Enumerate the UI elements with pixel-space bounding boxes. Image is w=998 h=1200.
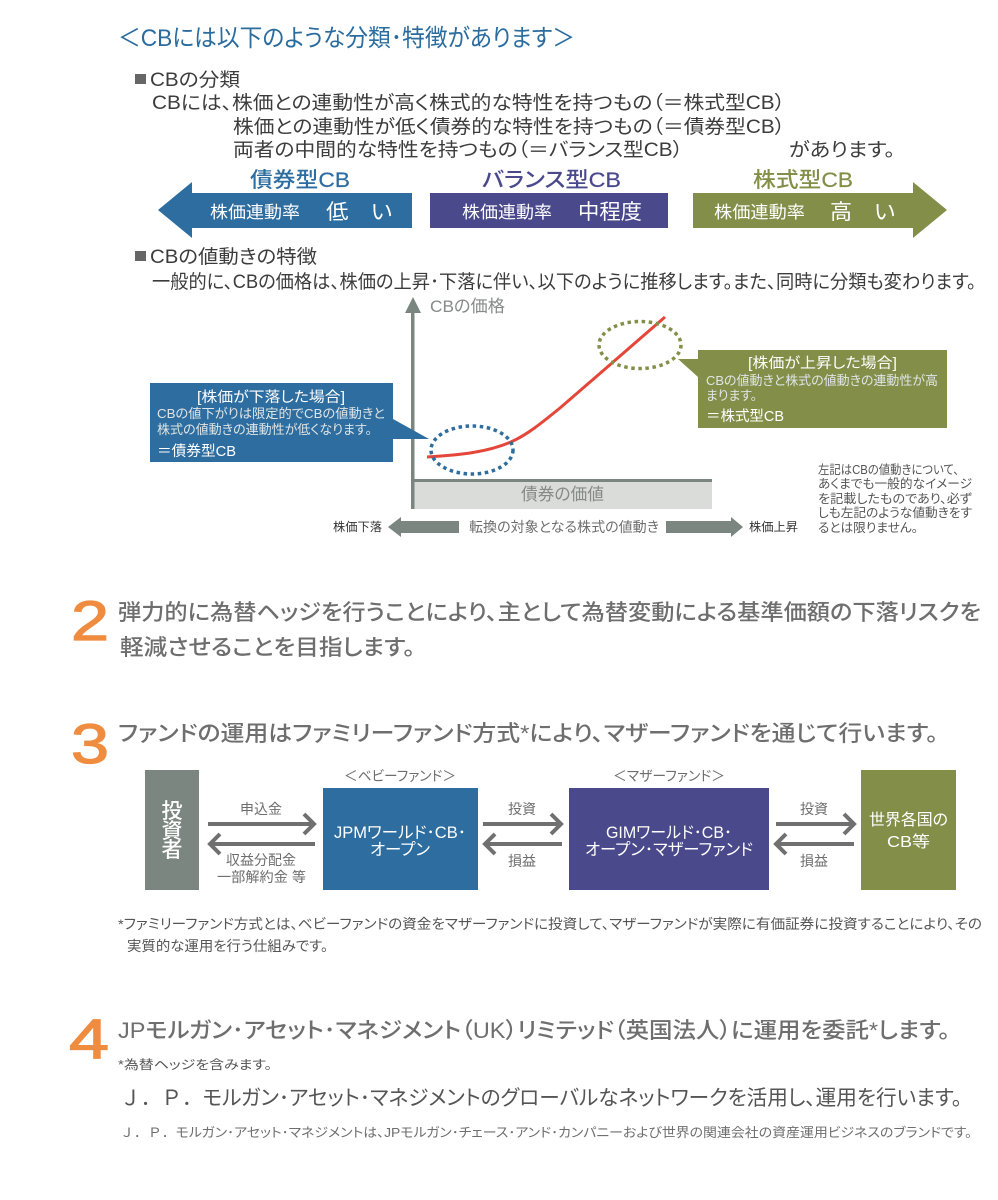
section 4 brand note: Ｊ．Ｐ． モルガン･アセット･マネジメントは、JPモルガン･チェース･アンド･カンパニーおよび世界の関連会社の資産運用ビジネスのブランドです。 (120, 1125, 972, 1140)
arrow: bond type low: 株価連動率 (210, 203, 300, 222)
footnote: family fund (118, 916, 982, 954)
arrow: equity type high: 株式型 CB (753, 169, 853, 192)
arrow labels: investment and return 1: 投資 (508, 801, 536, 817)
arrow: bond type low: 低 い (326, 201, 392, 224)
callout: stock price rises: CBの値動きと株式の値動きの連動性が高 (706, 373, 938, 388)
box: world CBs: 世界各国の (869, 811, 948, 829)
arrow labels: investment and return 2 (800, 801, 828, 869)
y axis label: CBの価格 (430, 297, 505, 316)
section 3 text: ファンドの運用はファミリーファンド方式*により、マザーファンドを通じて行います。 (118, 721, 938, 746)
section 4 note: *為替ヘッジを含みます。 (118, 1058, 272, 1072)
arrow labels: investment and return 2: 損益 (800, 853, 828, 869)
text: classification line 3 ending: があります。 (789, 139, 895, 161)
x axis: label: 転換の対象となる株式の値動き (469, 519, 659, 535)
arrows: investment and return 2 (776, 814, 854, 854)
footnote: family fund: *ファミリーファンド方式とは、ベビーファンドの資金をマザーファンドに投資して、マザーファンドが実際に有価証券に投資することにより、その (118, 916, 982, 932)
callout: stock price falls (150, 383, 429, 462)
panel: correlation arrows (158, 169, 947, 238)
arrow: equity type high: 高 い (830, 201, 895, 224)
text: classification line 2: 株価との連動性が低く債券的な特性を持つもの（＝債券型CB） (233, 116, 785, 138)
y axis arrow (405, 297, 421, 509)
box: GIM world CB open mother fund: GIMワールド･CB･ (606, 824, 732, 842)
arrow labels: subscription and distributions: 申込金 (240, 801, 282, 817)
arrow: equity type high: 株価連動率 (714, 203, 805, 222)
box: investor: 投 (162, 800, 182, 823)
box: world CBs (861, 770, 956, 890)
bond value band: 債券の価値 (521, 485, 604, 504)
note text: るとは限りません。 (818, 521, 918, 535)
title: ＜CBには以下のような分類･特徴があります＞ (118, 25, 575, 52)
flow diagram (145, 768, 956, 890)
section 4 body: Ｊ．Ｐ．モルガン･アセット･マネジメントのグローバルなネットワークを活用し、運用を行います。 (120, 1087, 962, 1110)
red price curve (427, 317, 665, 457)
arrows: subscription and distributions (208, 814, 315, 854)
box: GIM world CB open mother fund: オープン･マザーファンド (585, 840, 753, 859)
section 4 heading: JPモルガン･アセット･マネジメント（UK）リミテッド（英国法人）に運用を委託*します。 (118, 1018, 950, 1043)
label: baby fund: ＜ベビーファンド＞ (344, 768, 456, 784)
text: classification line 1: CBには、株価との連動性が高く株式的な特性を持つもの（＝株式型CB） (152, 92, 785, 114)
label: mother fund: ＜マザーファンド＞ (613, 768, 725, 784)
callout: stock price falls: CBの値下がりは限定的でCBの値動きと (157, 406, 385, 421)
arrow labels: subscription and distributions: 一部解約金 等 (217, 869, 306, 885)
arrow: bond type low (158, 169, 412, 238)
box: JPM world CB open: オープン (370, 840, 430, 859)
arrow: bond type low: 債券型 CB (250, 169, 350, 192)
arrow: equity type high (693, 169, 947, 238)
callout: stock price falls: ＝債券型CB (157, 443, 236, 460)
arrow labels: investment and return 1: 損益 (508, 853, 536, 869)
arrows: investment and return 1 (483, 814, 562, 854)
bar: balanced type medium (430, 169, 668, 228)
chart: CB price curve (150, 297, 947, 537)
section 2 text: 軽減させることを目指します。 (120, 635, 415, 660)
bar: balanced type medium: 株価連動率 (462, 203, 552, 222)
note text: 左記はCBの値動きについて、 (818, 462, 959, 477)
section 2 (71, 589, 981, 660)
bullet heading: classification: CBの分類 (150, 69, 240, 91)
callout: stock price falls: 株式の値動きの連動性が低くなります。 (157, 422, 372, 437)
box: world CBs: CB等 (887, 833, 930, 851)
section 2 text (118, 600, 981, 660)
x axis: falling label: 株価下落 (333, 519, 382, 534)
box: JPM world CB open (323, 788, 478, 890)
green dotted ellipse (599, 322, 681, 368)
text: classification line 3: 両者の中間的な特性を持つもの（＝バランス型CB） (233, 139, 683, 161)
arrow labels: investment and return 1 (508, 801, 536, 869)
note text: あくまでも一般的なイメージ (818, 476, 972, 491)
callout: stock price rises: [株価が上昇した場合] (748, 355, 897, 372)
bar: balanced type medium: 中程度 (578, 201, 642, 224)
arrow labels: subscription and distributions (217, 801, 306, 885)
callout: stock price falls: [株価が下落した場合] (197, 389, 345, 406)
arrow labels: investment and return 2: 投資 (800, 801, 828, 817)
note text: を記載したものであり、必ず (818, 492, 972, 506)
arrow labels: subscription and distributions: 収益分配金 (226, 852, 296, 868)
x axis: right arrow (666, 517, 743, 537)
box: GIM world CB open mother fund (569, 788, 769, 890)
section 4 (69, 1007, 972, 1140)
note text (818, 462, 972, 535)
bar: balanced type medium: バランス型 CB (482, 169, 621, 192)
box: investor: 資 (162, 820, 182, 843)
blue dotted ellipse (431, 426, 513, 474)
x axis: rising label: 株価上昇 (749, 519, 798, 534)
bullet heading: price movement: CBの値動きの特徴 (150, 246, 317, 268)
bond value band (412, 479, 712, 509)
note text: しも左記のような値動きをす (818, 505, 972, 520)
text: price movement description: 一般的に、CBの価格は、株価の上昇･下落に伴い、以下のように推移します。また、同時に分類も変わります。 (152, 271, 976, 293)
callout: stock price rises (678, 350, 947, 428)
box: JPM world CB open: JPMワールド･CB･ (334, 824, 466, 842)
numeral 2: 2 (71, 589, 109, 652)
section 2 text: 弾力的に為替ヘッジを行うことにより、主として為替変動による基準価額の下落リスクを (118, 600, 981, 625)
box: investor: 者 (162, 839, 182, 862)
x axis: left arrow (388, 517, 459, 537)
box: investor (145, 770, 199, 890)
section 3 heading (71, 712, 938, 775)
callout: stock price rises: ＝株式型CB (706, 408, 784, 425)
callout: stock price rises: まります。 (706, 388, 757, 403)
panel: CB classification text (135, 69, 895, 161)
numeral 3: 3 (71, 712, 109, 775)
footnote: family fund: 実質的な運用を行う仕組みです。 (127, 938, 328, 954)
numeral 4: 4 (69, 1007, 109, 1070)
